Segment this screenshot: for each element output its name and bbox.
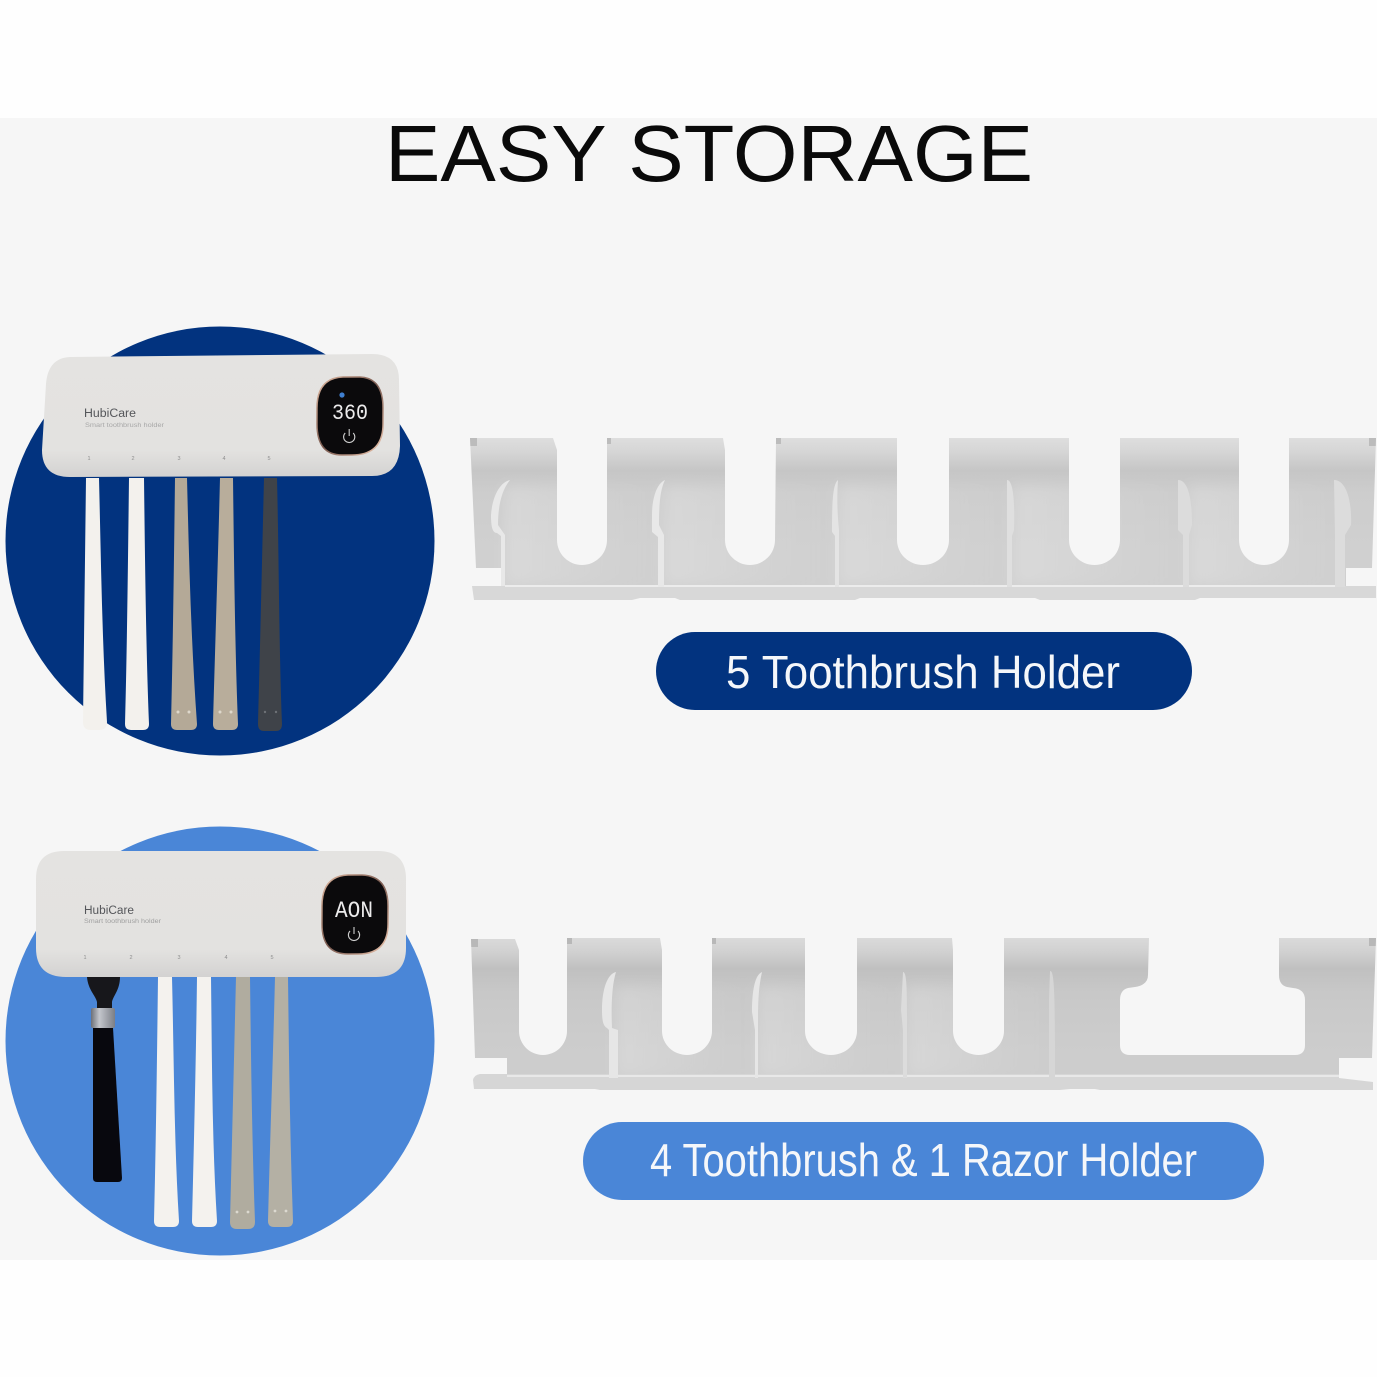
panel: 4 toothbrush and 1 razor bracket [471, 938, 1376, 1090]
razor [87, 977, 122, 1182]
circle backdrop: dark blue [6, 326, 434, 756]
slot numbers: 2 [131, 456, 135, 462]
slot numbers [83, 955, 274, 961]
slot numbers: 2 [129, 955, 133, 961]
UV sanitizer holder unit [36, 851, 406, 977]
bracket plate [471, 938, 1376, 1078]
base strip [473, 1074, 1373, 1090]
lit facets [470, 438, 1376, 530]
circle backdrop: light blue [6, 826, 434, 1256]
tagline: Smart toothbrush holder [84, 918, 162, 925]
lit facets [471, 938, 1376, 1077]
brand text: HubiCare [84, 408, 136, 420]
display panel [322, 875, 388, 954]
toothbrush handles [154, 977, 293, 1229]
display panel [317, 377, 383, 455]
slot numbers: 1 [87, 456, 91, 462]
slot numbers: 3 [177, 456, 181, 462]
display panel: AON [335, 898, 373, 924]
panel: 5 toothbrush product photo [6, 326, 434, 756]
slot numbers: 5 [267, 456, 271, 462]
tagline: Smart toothbrush holder [85, 422, 165, 429]
divider ribs [602, 971, 1055, 1078]
display panel: 360 [332, 401, 368, 426]
toothbrush handles [83, 478, 282, 731]
panel: 5 toothbrush bracket [470, 438, 1376, 600]
bracket plate [470, 438, 1376, 586]
pill label: 4 toothbrush and 1 razor holder: 4 Toothbrush & 1 Razor Holder [650, 1134, 1197, 1186]
pill label: 5 toothbrush holder [656, 632, 1192, 710]
pill label: 4 toothbrush and 1 razor holder [583, 1122, 1264, 1200]
title: EASY STORAGE [385, 109, 1033, 198]
slot numbers: 3 [177, 955, 181, 961]
slot numbers [87, 456, 271, 462]
base strip [472, 586, 1376, 600]
UV sanitizer holder unit [42, 354, 400, 477]
slot numbers: 5 [270, 955, 274, 961]
divider ribs [491, 480, 1351, 587]
brand text: HubiCare [84, 905, 134, 917]
slot numbers: 4 [222, 456, 226, 462]
pill label: 5 toothbrush holder: 5 Toothbrush Holder [726, 646, 1120, 698]
panel: 4 toothbrush and razor product photo [6, 826, 434, 1256]
slot numbers: 1 [83, 955, 87, 961]
slot numbers: 4 [224, 955, 228, 961]
